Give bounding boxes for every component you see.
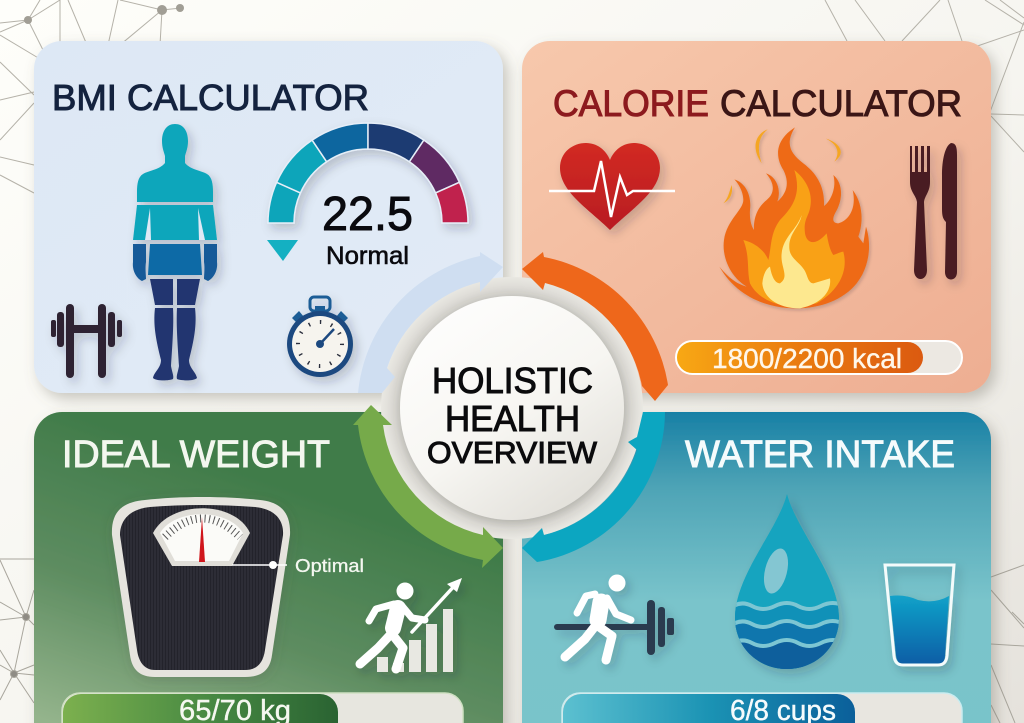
BMI status: Normal: [326, 242, 409, 270]
BMI value: 22.5: [322, 188, 413, 241]
hub: holistic health overview: HEALTH: [445, 398, 580, 439]
central cycle: [353, 252, 668, 568]
panel: calorie calculator: [522, 41, 991, 393]
label: optimal: Optimal: [295, 556, 364, 576]
arrow: calorie: [522, 252, 668, 401]
icon: fork and knife: [910, 143, 957, 280]
panel: water intake: [522, 412, 991, 723]
progress bar: calories: 1800/2200 kcal: [712, 343, 902, 374]
progress bar: weight: [62, 693, 463, 723]
network pattern: top right: [825, 0, 1024, 152]
heading: BMI calculator: BMI CALCULATOR: [52, 77, 369, 118]
progress bar: calories: [676, 341, 962, 374]
gauge marker: [267, 240, 298, 261]
icon: stopwatch: [287, 297, 353, 377]
icon: body silhouette: [133, 124, 217, 380]
icon: water drop: [730, 494, 844, 680]
heading: calorie calculator: CALORIE: [553, 83, 709, 124]
heading: calorie calculator: [553, 83, 962, 124]
network pattern: right and bottom left: [0, 559, 1024, 723]
label: optimal: [232, 556, 364, 576]
icon: runner with barbell: [554, 574, 674, 660]
heading: ideal weight: IDEAL WEIGHT: [62, 434, 330, 476]
icon: dumbbell: [51, 304, 122, 378]
chart: BMI gauge: [268, 123, 468, 223]
heading: calorie calculator: CALCULATOR: [720, 83, 962, 124]
network pattern: top left: [0, 0, 184, 193]
hub: holistic health overview: HOLISTIC: [432, 360, 593, 401]
hub: holistic health overview: [400, 296, 624, 520]
heading: water intake: WATER INTAKE: [685, 434, 955, 476]
icon: glass of water: [885, 565, 954, 665]
icon: heart with pulse: [549, 143, 675, 230]
arrow: BMI to calorie: [358, 252, 503, 393]
arrow: ideal weight: [353, 405, 503, 568]
icon: bathroom scale: [112, 497, 290, 677]
panel: ideal weight: [34, 412, 503, 723]
icon: runner climbing bars: [360, 578, 462, 672]
progress bar: water: [562, 693, 962, 723]
hub: holistic health overview: OVERVIEW: [427, 435, 598, 470]
icon: flame: [719, 127, 869, 308]
arrow: water: [522, 412, 665, 562]
panel: BMI calculator: [34, 41, 503, 393]
